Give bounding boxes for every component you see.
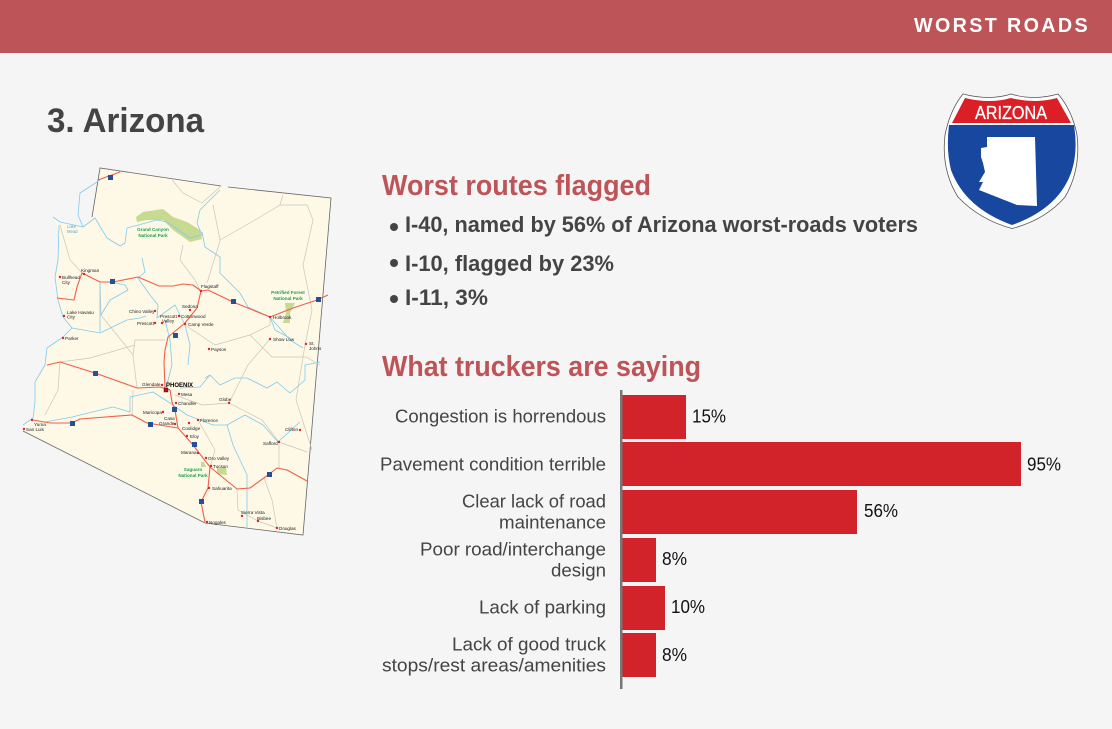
city names: St. — [309, 341, 315, 346]
city names: Eloy — [190, 434, 200, 439]
interstate markers — [70, 175, 321, 504]
bar: parking: 10% — [671, 597, 705, 617]
city names: Prescott — [137, 321, 155, 326]
city names: Coolidge — [182, 426, 201, 431]
city names: Nogales — [209, 520, 227, 525]
list of flagged routes: I-40, named by 56% of Arizona worst-roads voters — [405, 212, 918, 237]
list of flagged routes: I-10, flagged by 23% — [405, 251, 614, 276]
bar: maintenance: 56% — [864, 501, 898, 521]
water labels — [67, 224, 78, 234]
bar: design — [420, 538, 687, 582]
city names: Payson — [211, 347, 227, 352]
national park names: National Park — [273, 296, 303, 301]
city names: City — [62, 280, 71, 285]
bar: pavement — [380, 442, 1061, 486]
city names: Yuma — [34, 422, 46, 427]
interstate shield icon — [944, 94, 1078, 228]
bar: truck stops — [382, 633, 687, 677]
list of flagged routes: I-11, 3% — [405, 285, 488, 310]
bar: design: design — [551, 560, 606, 580]
city names: Sedona — [182, 304, 198, 309]
heading: worst routes: Worst routes flagged — [382, 170, 651, 202]
city names: Mesa — [181, 392, 193, 397]
city names: Show Low — [273, 337, 295, 342]
interstate shield icon: ARIZONA — [975, 103, 1047, 123]
city names: Globe — [219, 397, 232, 402]
bar: truck stops: Lack of good truck — [452, 634, 607, 654]
city names: Marana — [181, 450, 197, 455]
bar: congestion: Congestion is horrendous — [395, 406, 606, 426]
national park names — [137, 227, 305, 478]
water labels: Lake — [67, 224, 77, 229]
city names: Maricopa — [143, 410, 162, 415]
city names: Glendale — [142, 382, 161, 387]
city names: Florence — [200, 418, 218, 423]
national park names: National Park — [138, 233, 168, 238]
bar: parking: Lack of parking — [479, 598, 606, 618]
header label: WORST ROADS — [914, 15, 1090, 37]
city names: City — [67, 314, 76, 320]
heading: truckers: What truckers are saying — [382, 351, 701, 383]
city names: Casa — [164, 416, 175, 421]
city names: Sierra Vista — [241, 510, 265, 515]
bar: maintenance: maintenance — [499, 512, 606, 532]
city names: Grande — [159, 421, 175, 426]
city names: Johns — [309, 346, 322, 351]
bar: truck stops: 8% — [662, 645, 687, 665]
city names: Flagstaff — [201, 284, 219, 289]
bar: design: Poor road/interchange — [420, 540, 606, 560]
city names: Douglas — [279, 526, 297, 531]
map of Arizona — [23, 168, 331, 535]
city names: Oro Valley — [208, 456, 230, 461]
bar: maintenance: Clear lack of road — [462, 492, 606, 512]
national park names: Petrified Forest — [271, 290, 305, 295]
minor roads — [45, 180, 320, 528]
city markers — [23, 273, 307, 529]
bar: congestion — [395, 395, 726, 439]
national park names: National Park — [178, 473, 208, 478]
city names: Cottonwood — [181, 314, 206, 319]
city names: Kingman — [81, 268, 100, 273]
city names: Safford — [263, 441, 278, 446]
bar: design: 8% — [662, 549, 687, 569]
city names: Tucson — [213, 464, 228, 469]
city names: Chandler — [178, 401, 197, 406]
bar: maintenance — [462, 490, 898, 534]
interstate highways — [33, 172, 328, 522]
city names: PHOENIX — [166, 383, 193, 389]
city names: San Luis — [26, 427, 45, 432]
city names: Valley — [162, 318, 175, 324]
bar: pavement: 95% — [1027, 454, 1061, 474]
national park names: Saguaro — [184, 467, 202, 472]
bar: pavement: Pavement condition terrible — [380, 454, 606, 474]
city names: Bullhead — [62, 275, 80, 280]
bar: congestion: 15% — [692, 406, 726, 426]
list of flagged routes — [390, 212, 918, 310]
national park names: Grand Canyon — [137, 227, 169, 232]
city names: Clifton — [285, 427, 298, 432]
national park areas — [136, 209, 295, 475]
header bar — [0, 0, 1112, 53]
water labels: Mead — [67, 229, 78, 234]
city names: Chino Valley — [129, 309, 155, 314]
city names: Holbrook — [273, 315, 292, 320]
city names: Bisbee — [257, 516, 271, 521]
title: 3. Arizona — [47, 102, 205, 140]
city names: Lake Havasu — [67, 310, 94, 315]
bar: truck stops: stops/rest areas/amenities — [382, 656, 606, 676]
city names: Camp Verde — [188, 322, 214, 327]
city names: Prescott — [160, 314, 178, 319]
bar chart — [380, 390, 1061, 689]
city names — [26, 268, 322, 531]
bar: parking — [479, 586, 705, 630]
city names: Parker — [65, 336, 79, 341]
rivers — [23, 180, 320, 528]
city names: Sahuarita — [212, 486, 232, 491]
